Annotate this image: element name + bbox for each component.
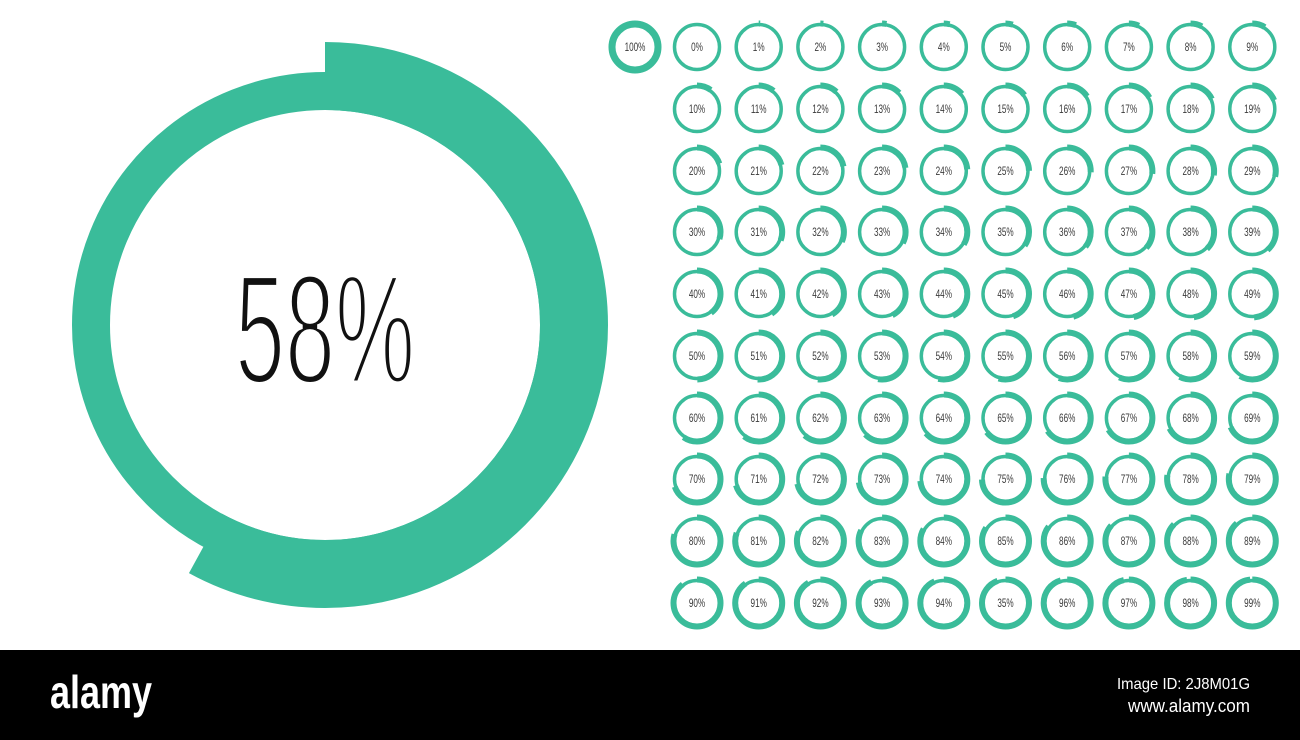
grid of small percentage rings: 32%: [812, 227, 829, 240]
grid of small percentage rings: 70%: [689, 474, 705, 487]
grid of small percentage rings: 96%: [1059, 598, 1075, 611]
grid of small percentage rings: 23%: [874, 166, 890, 179]
grid of small percentage rings: 35%: [997, 227, 1014, 240]
grid of small percentage rings: 0%: [691, 42, 703, 55]
grid of small percentage rings: 19%: [1244, 104, 1260, 117]
grid of small percentage rings: 94%: [936, 598, 952, 611]
grid of small percentage rings: 86%: [1059, 536, 1075, 549]
grid of small percentage rings: 78%: [1182, 474, 1199, 487]
grid of small percentage rings: 4%: [938, 42, 950, 55]
grid of small percentage rings: 27%: [1121, 166, 1137, 179]
logo: alamy: alamy: [50, 666, 152, 718]
grid of small percentage rings: 74%: [936, 474, 952, 487]
grid of small percentage rings: 11%: [751, 104, 767, 117]
grid of small percentage rings: 81%: [751, 536, 767, 549]
grid of small percentage rings: 82%: [812, 536, 829, 549]
grid of small percentage rings: 14%: [936, 104, 952, 117]
grid of small percentage rings: 46%: [1059, 289, 1075, 302]
grid of small percentage rings: 16%: [1059, 104, 1075, 117]
grid of small percentage rings: 97%: [1121, 598, 1137, 611]
grid of small percentage rings: 26%: [1059, 166, 1075, 179]
grid of small percentage rings: 56%: [1059, 351, 1075, 364]
grid of small percentage rings: 18%: [1182, 104, 1199, 117]
grid of small percentage rings: 63%: [874, 413, 890, 426]
grid of small percentage rings: 64%: [936, 413, 952, 426]
grid of small percentage rings: 48%: [1182, 289, 1199, 302]
grid of small percentage rings: 77%: [1121, 474, 1137, 487]
grid of small percentage rings: 98%: [1182, 598, 1199, 611]
grid of small percentage rings: 49%: [1244, 289, 1260, 302]
grid of small percentage rings: 93%: [874, 598, 890, 611]
grid of small percentage rings: 3%: [876, 42, 888, 55]
grid of small percentage rings: 52%: [812, 351, 829, 364]
grid of small percentage rings: 59%: [1244, 351, 1260, 364]
grid of small percentage rings: 73%: [874, 474, 890, 487]
grid of small percentage rings: [612, 24, 1276, 626]
grid of small percentage rings: 71%: [751, 474, 767, 487]
grid of small percentage rings: 79%: [1244, 474, 1260, 487]
grid of small percentage rings: 67%: [1121, 413, 1137, 426]
grid of small percentage rings: 35%: [997, 598, 1014, 611]
grid of small percentage rings: 45%: [997, 289, 1014, 302]
grid of small percentage rings: 44%: [936, 289, 952, 302]
grid of small percentage rings: 87%: [1121, 536, 1137, 549]
grid of small percentage rings: 2%: [815, 42, 826, 55]
grid of small percentage rings: 66%: [1059, 413, 1075, 426]
grid of small percentage rings: 10%: [689, 104, 705, 117]
grid of small percentage rings: 39%: [1244, 227, 1260, 240]
grid of small percentage rings: 40%: [689, 289, 705, 302]
grid of small percentage rings: 69%: [1244, 413, 1260, 426]
grid of small percentage rings: 1%: [753, 42, 765, 55]
grid of small percentage rings: 75%: [997, 474, 1014, 487]
grid of small percentage rings: 15%: [997, 104, 1014, 117]
grid of small percentage rings: 29%: [1244, 166, 1260, 179]
grid of small percentage rings: 42%: [812, 289, 829, 302]
grid of small percentage rings: 13%: [874, 104, 890, 117]
grid of small percentage rings: 24%: [936, 166, 952, 179]
grid of small percentage rings: 33%: [874, 227, 890, 240]
grid of small percentage rings: 62%: [812, 413, 829, 426]
grid of small percentage rings: 21%: [751, 166, 767, 179]
grid of small percentage rings: 88%: [1182, 536, 1199, 549]
grid of small percentage rings: 50%: [689, 351, 705, 364]
grid of small percentage rings: 100%: [625, 42, 645, 55]
grid of small percentage rings: 31%: [751, 227, 767, 240]
website text: www.alamy.com: [1127, 696, 1250, 716]
grid of small percentage rings: 28%: [1182, 166, 1199, 179]
grid of small percentage rings: 17%: [1121, 104, 1137, 117]
grid of small percentage rings: 36%: [1059, 227, 1075, 240]
grid of small percentage rings: 57%: [1121, 351, 1137, 364]
grid of small percentage rings: 90%: [689, 598, 705, 611]
grid of small percentage rings: 8%: [1185, 42, 1196, 55]
grid of small percentage rings: 20%: [689, 166, 705, 179]
grid of small percentage rings: 68%: [1182, 413, 1199, 426]
grid of small percentage rings: 80%: [689, 536, 705, 549]
grid of small percentage rings: 7%: [1123, 42, 1135, 55]
image id text: Image ID: 2J8M01G: [1117, 676, 1250, 693]
grid of small percentage rings: 30%: [689, 227, 705, 240]
big donut chart: 58%: [76, 76, 574, 574]
grid of small percentage rings: 12%: [812, 104, 829, 117]
footer bar: [0, 650, 1300, 740]
grid of small percentage rings: 99%: [1244, 598, 1260, 611]
grid of small percentage rings: 38%: [1182, 227, 1199, 240]
grid of small percentage rings: 89%: [1244, 536, 1260, 549]
grid of small percentage rings: 61%: [751, 413, 767, 426]
grid of small percentage rings: 43%: [874, 289, 890, 302]
grid of small percentage rings: 9%: [1246, 42, 1258, 55]
grid of small percentage rings: 72%: [812, 474, 829, 487]
grid of small percentage rings: 65%: [997, 413, 1014, 426]
grid of small percentage rings: 58%: [1182, 351, 1199, 364]
grid of small percentage rings: 37%: [1121, 227, 1137, 240]
grid of small percentage rings: 83%: [874, 536, 890, 549]
grid of small percentage rings: 25%: [997, 166, 1014, 179]
grid of small percentage rings: 91%: [751, 598, 767, 611]
grid of small percentage rings: 51%: [751, 351, 767, 364]
grid of small percentage rings: 92%: [812, 598, 829, 611]
grid of small percentage rings: 41%: [751, 289, 767, 302]
grid of small percentage rings: 53%: [874, 351, 890, 364]
grid of small percentage rings: 5%: [1000, 42, 1011, 55]
grid of small percentage rings: 55%: [997, 351, 1014, 364]
grid of small percentage rings: 60%: [689, 413, 705, 426]
grid of small percentage rings: 84%: [936, 536, 952, 549]
grid of small percentage rings: 22%: [812, 166, 829, 179]
grid of small percentage rings: 6%: [1061, 42, 1073, 55]
grid of small percentage rings: 76%: [1059, 474, 1075, 487]
grid of small percentage rings: 34%: [936, 227, 952, 240]
grid of small percentage rings: 85%: [997, 536, 1014, 549]
grid of small percentage rings: 54%: [936, 351, 952, 364]
grid of small percentage rings: 47%: [1121, 289, 1137, 302]
big percentage label: 58%: [235, 243, 415, 417]
